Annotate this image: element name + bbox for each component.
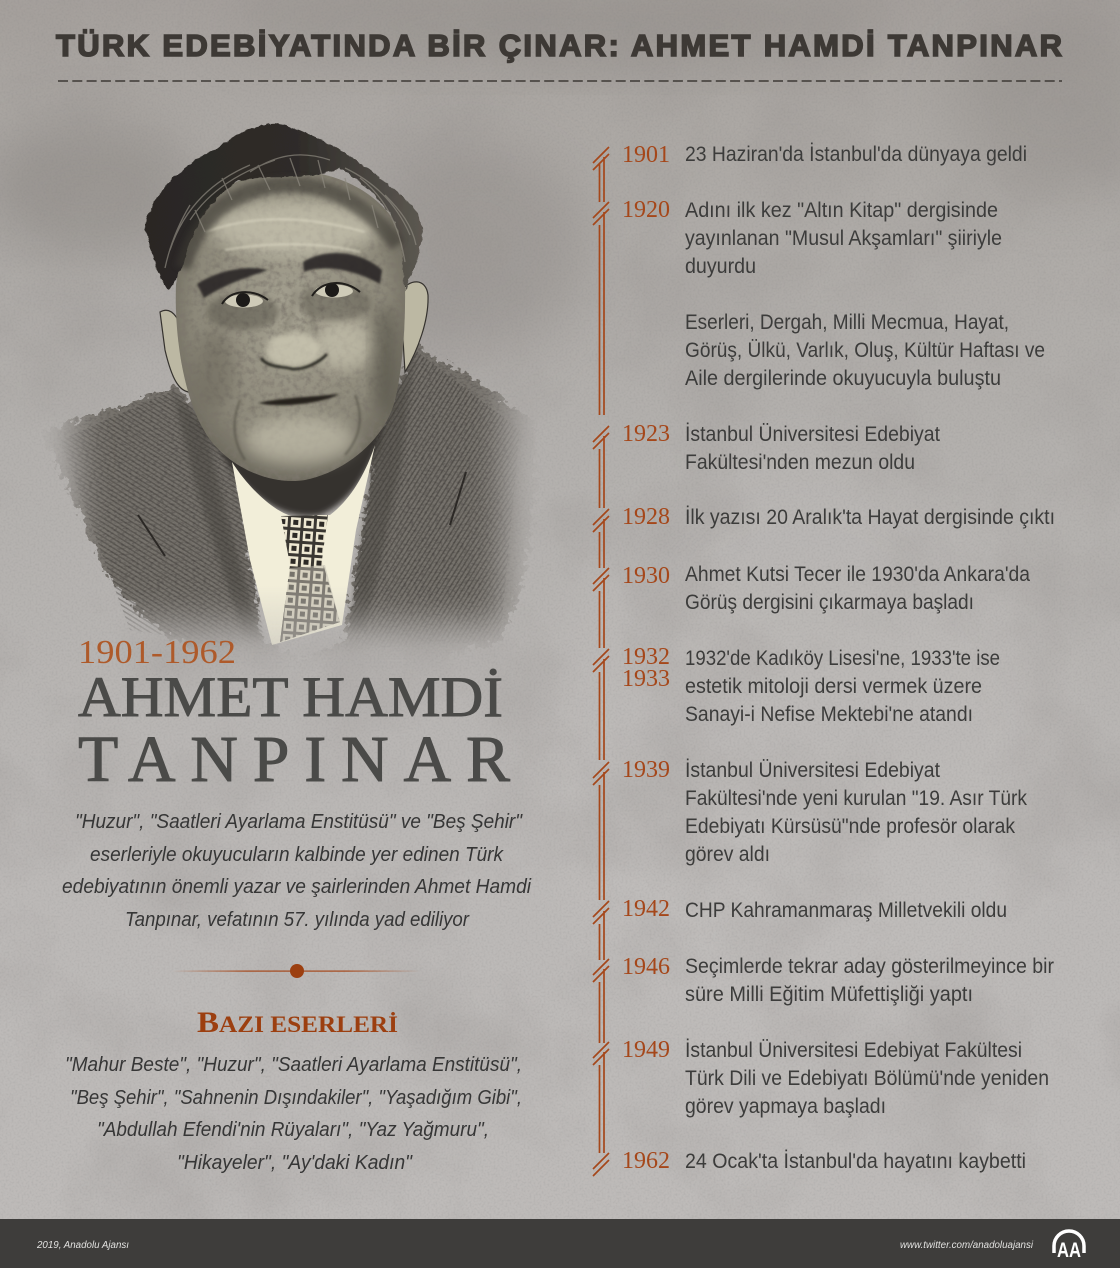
timeline entry 1962 — [622, 1147, 1026, 1174]
timeline entry 1949: görev yapmaya başladı — [685, 1095, 886, 1118]
works list: "Abdullah Efendi'nin Rüyaları", "Yaz Yağmuru", — [97, 1119, 489, 1141]
timeline entry 1962: 1962 — [622, 1147, 670, 1174]
timeline entry 1949: İstanbul Üniversitesi Edebiyat Fakültesi — [685, 1039, 1022, 1062]
timeline entry 1932 1933: 1933 — [622, 665, 670, 692]
timeline entry 1949 — [622, 1036, 1049, 1118]
timeline entry 1942: CHP Kahramanmaraş Milletvekili oldu — [685, 899, 1007, 922]
timeline entry 1928: İlk yazısı 20 Aralık'ta Hayat dergisinde çıktı — [685, 506, 1055, 529]
timeline entry 1920: Eserleri, Dergah, Milli Mecmua, Hayat, — [685, 311, 1009, 334]
works list: "Mahur Beste", "Huzur", "Saatleri Ayarlama Enstitüsü", — [65, 1054, 522, 1076]
timeline entry 1920: duyurdu — [685, 255, 756, 278]
timeline entry 1920 — [622, 196, 1045, 390]
portrait: face shading — [195, 200, 397, 464]
timeline entry 1946: Seçimlerde tekrar aday gösterilmeyince bir — [685, 955, 1054, 978]
works list — [65, 1054, 522, 1174]
timeline entry 1930: 1930 — [622, 562, 670, 589]
timeline entry 1932 1933: Sanayi-i Nefise Mektebi'ne atandı — [685, 703, 973, 726]
portrait: eyes — [222, 283, 360, 308]
name heading: TANPINAR — [78, 723, 510, 796]
portrait: hair — [146, 124, 423, 292]
timeline entry 1949: Türk Dili ve Edebiyatı Bölümü'nde yeniden — [685, 1067, 1049, 1090]
portrait: ears — [160, 282, 428, 392]
portrait: jacket — [52, 343, 528, 649]
intro paragraph: edebiyatının önemli yazar ve şairlerinden Ahmet Hamdi — [62, 876, 532, 898]
timeline entry 1923: İstanbul Üniversitesi Edebiyat — [685, 423, 940, 446]
timeline entry 1923: Fakültesi'nden mezun oldu — [685, 451, 915, 474]
timeline entry 1946 — [622, 953, 1054, 1006]
timeline entry 1939: Fakültesi'nde yeni kurulan "19. Asır Türk — [685, 787, 1027, 810]
intro paragraph: "Huzur", "Saatleri Ayarlama Enstitüsü" ve "Beş Şehir" — [75, 811, 523, 833]
timeline entry 1901 — [622, 141, 1027, 168]
timeline entry 1939 — [622, 756, 1027, 866]
timeline entry 1920: yayınlanan "Musul Akşamları" şiiriyle — [685, 227, 1002, 250]
footer twitter address: www.twitter.com/anadoluajansi — [900, 1240, 1034, 1251]
timeline entry 1923: 1923 — [622, 420, 670, 447]
timeline entry 1920: Adını ilk kez "Altın Kitap" dergisinde — [685, 199, 998, 222]
timeline entry 1946: süre Milli Eğitim Müfettişliği yaptı — [685, 983, 973, 1006]
timeline entry 1939: görev aldı — [685, 843, 770, 866]
timeline rail — [593, 147, 609, 1176]
portrait: eyebrows — [197, 253, 382, 298]
timeline entry 1901: 23 Haziran'da İstanbul'da dünyaya geldi — [685, 143, 1027, 166]
works heading: BAZI ESERLERİ — [197, 1006, 398, 1039]
title dashed rule — [58, 80, 1062, 82]
timeline entry 1939: Edebiyatı Kürsüsü"nde profesör olarak — [685, 815, 1015, 838]
footer band — [0, 1219, 1120, 1268]
timeline entry 1928 — [622, 503, 1055, 530]
timeline entry 1930: Ahmet Kutsi Tecer ile 1930'da Ankara'da — [685, 563, 1030, 586]
footer credit: 2019, Anadolu Ajansı — [36, 1240, 129, 1251]
portrait: hair strands — [165, 155, 416, 268]
timeline entry 1930: Görüş dergisini çıkarmaya başladı — [685, 591, 974, 614]
timeline entry 1932 1933 — [622, 643, 1000, 726]
timeline entry 1939: 1939 — [622, 756, 670, 783]
timeline entry 1930 — [622, 562, 1030, 614]
timeline entry 1920: Aile dergilerinde okuyucuyla buluştu — [685, 367, 1001, 390]
intro paragraph — [62, 811, 532, 931]
works list: "Hikayeler", "Ay'daki Kadın" — [177, 1152, 413, 1174]
portrait: shirt — [232, 445, 375, 645]
life years: 1901-1962 — [78, 634, 236, 671]
timeline entry 1942: 1942 — [622, 895, 670, 922]
timeline entry 1920: Görüş, Ülkü, Varlık, Oluş, Kültür Haftası ve — [685, 339, 1045, 362]
timeline entry 1920: 1920 — [622, 196, 670, 223]
works list: "Beş Şehir", "Sahnenin Dışındakiler", "Yaşadığım Gibi", — [70, 1087, 522, 1109]
icon: Anadolu Agency logo: AA — [1057, 1239, 1081, 1262]
intro paragraph: eserleriyle okuyucuların kalbinde yer edinen Türk — [90, 844, 504, 866]
portrait: neck shadow — [200, 395, 395, 516]
portrait of Ahmet Hamdi Tanpınar — [40, 124, 536, 680]
name heading — [78, 666, 510, 796]
timeline entry 1932 1933: 1932 — [622, 643, 670, 670]
timeline entry 1962: 24 Ocak'ta İstanbul'da hayatını kaybetti — [685, 1150, 1026, 1173]
portrait: mouth — [258, 394, 340, 405]
icon: Anadolu Agency logo — [1054, 1231, 1084, 1262]
title: TÜRK EDEBİYATINDA BİR ÇINAR: AHMET HAMDİ TANPINAR — [56, 28, 1062, 63]
timeline entry 1923 — [622, 420, 940, 474]
name heading: AHMET HAMDİ — [78, 666, 503, 729]
portrait: hairline shadow — [183, 184, 398, 268]
timeline entry 1932 1933: estetik mitoloji dersi vermek üzere — [685, 675, 982, 698]
timeline entry 1939: İstanbul Üniversitesi Edebiyat — [685, 759, 940, 782]
timeline entry 1942 — [622, 895, 1007, 922]
portrait: face — [176, 171, 405, 481]
timeline entry 1949: 1949 — [622, 1036, 670, 1063]
intro paragraph: Tanpınar, vefatının 57. yılında yad ediliyor — [125, 909, 470, 931]
timeline entry 1946: 1946 — [622, 953, 670, 980]
ornament divider — [172, 964, 420, 978]
timeline entry 1932 1933: 1932'de Kadıköy Lisesi'ne, 1933'te ise — [685, 647, 1000, 670]
timeline entry 1901: 1901 — [622, 141, 670, 168]
timeline entry 1928: 1928 — [622, 503, 670, 530]
